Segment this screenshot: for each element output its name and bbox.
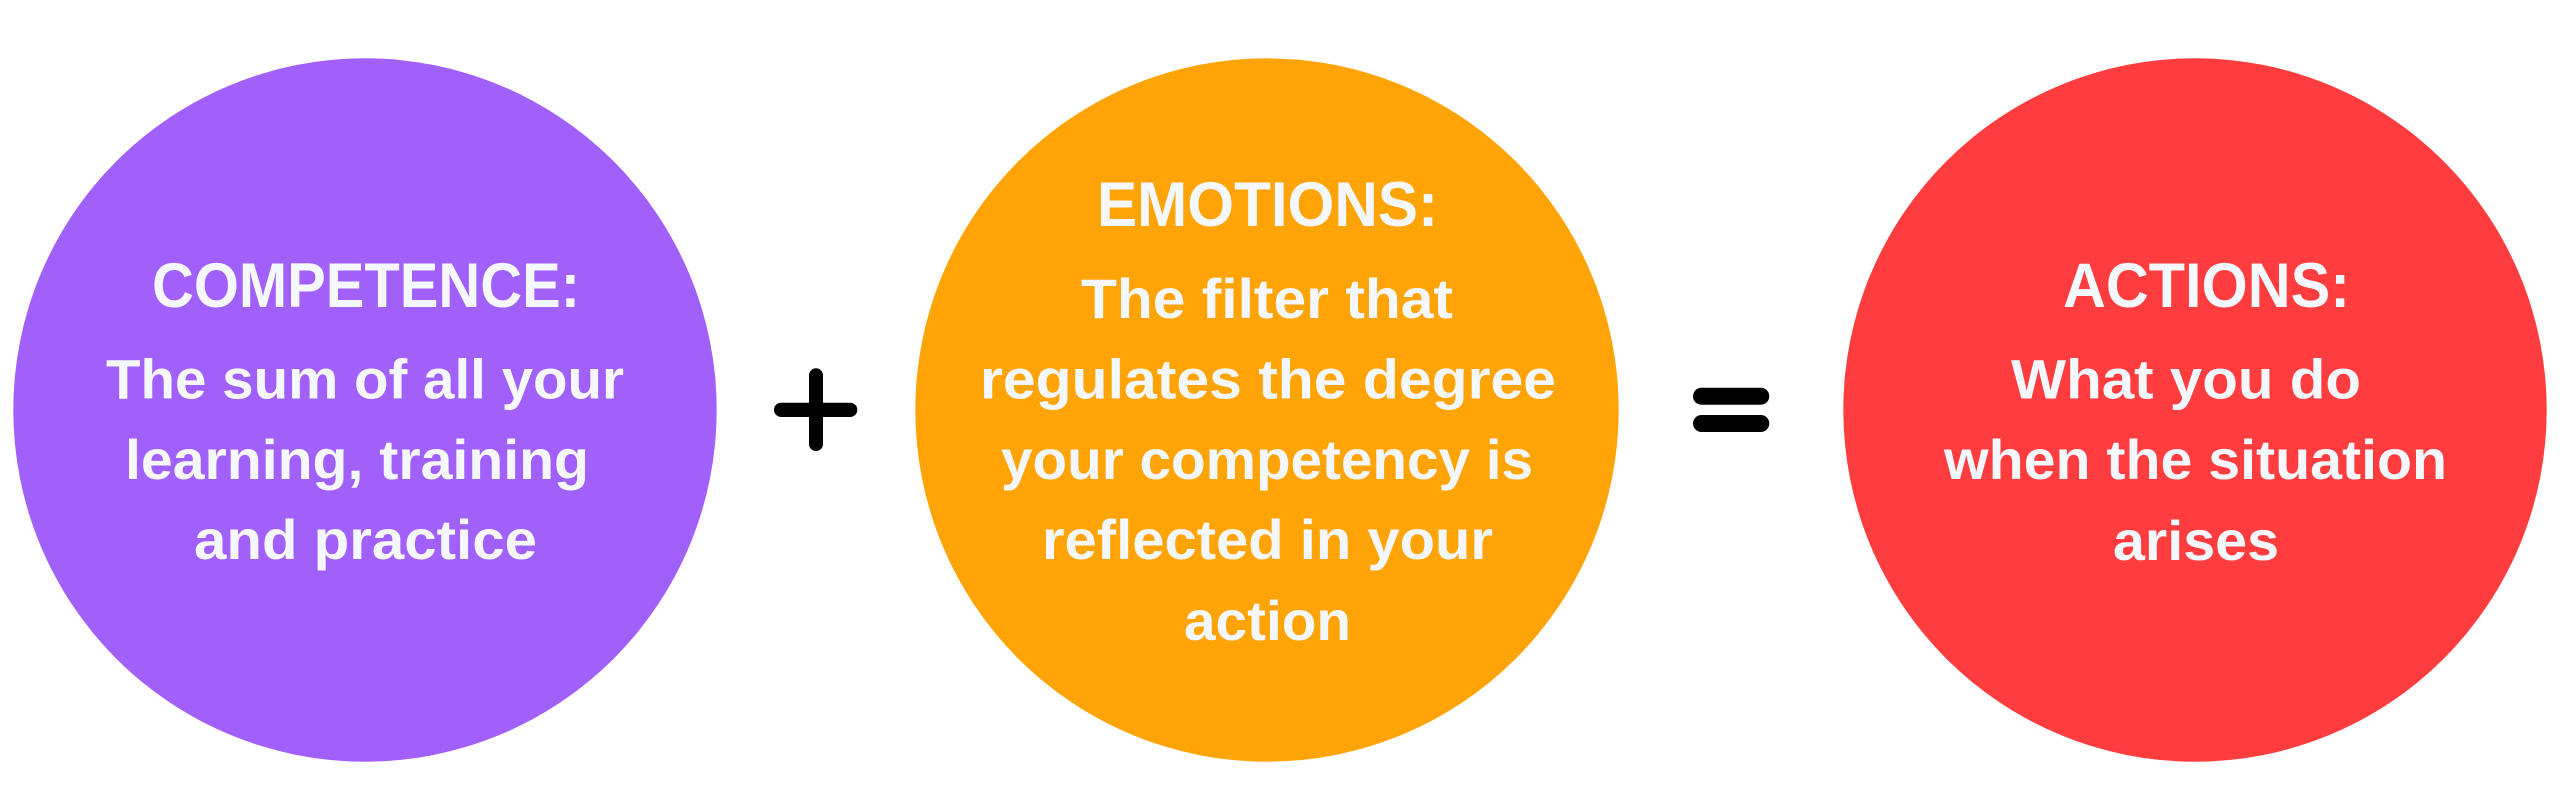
text block: competence description: and practice xyxy=(194,508,537,571)
text block: competence description: The sum of all your xyxy=(106,348,624,410)
panel: actions xyxy=(1843,58,2547,762)
icon: plus sign xyxy=(774,368,857,451)
heading: competence: COMPETENCE: xyxy=(152,251,580,321)
heading: actions: ACTIONS: xyxy=(2063,251,2350,321)
heading: emotions: EMOTIONS: xyxy=(1097,170,1438,240)
icon: equals sign xyxy=(1693,388,1769,432)
text block: competence description: learning, training xyxy=(125,428,589,491)
text block: emotions description: your competency is xyxy=(1001,428,1533,491)
text block: emotions description: regulates the degree xyxy=(980,348,1556,410)
text block: actions description: What you do xyxy=(2011,348,2361,410)
text block: actions description xyxy=(1943,348,2447,572)
text block: actions description: when the situation xyxy=(1943,428,2447,491)
text block: emotions description: The filter that xyxy=(1081,267,1453,330)
text block: emotions description xyxy=(980,267,1556,652)
text block: actions description: arises xyxy=(2113,509,2279,572)
panel: emotions xyxy=(915,58,1619,762)
text block: competence description xyxy=(106,348,624,571)
panel: competence xyxy=(13,58,717,762)
text block: emotions description: reflected in your xyxy=(1042,508,1493,571)
text block: emotions description: action xyxy=(1184,589,1351,652)
